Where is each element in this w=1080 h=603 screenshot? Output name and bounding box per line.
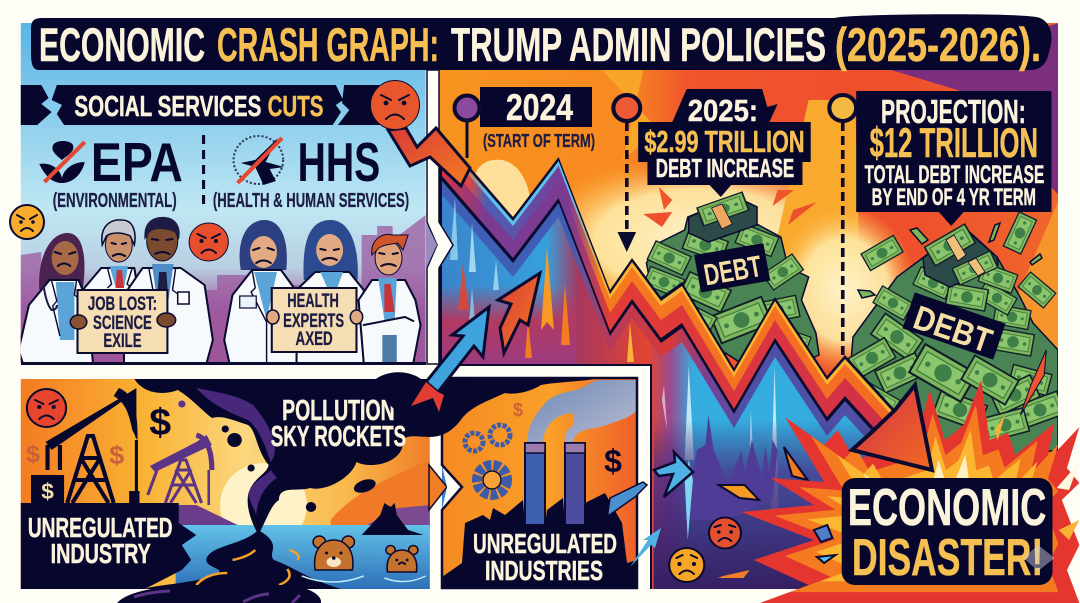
title banner: TRUMP ADMIN POLICIES — [451, 18, 826, 71]
gears — [465, 425, 510, 495]
purple haze in the plume — [196, 388, 277, 515]
chart callout: 2025 debt increase: $2.99 TRILLION — [644, 123, 805, 159]
title banner: ECONOMIC — [39, 18, 205, 71]
faint dollar: $ — [513, 400, 523, 420]
sad emoji red — [709, 518, 741, 548]
caption: health and human services: (HEALTH & HUMAN SERVICES) — [213, 190, 409, 212]
sign: health experts axed: HEALTH — [287, 291, 339, 312]
bear small — [386, 546, 418, 572]
bear large — [313, 536, 354, 570]
title banner: CRASH GRAPH: — [217, 18, 439, 71]
DEBT label: DEBT — [909, 299, 997, 361]
DEBT label: DEBT — [701, 250, 764, 292]
sign: health experts axed — [267, 288, 363, 352]
heading banner: social services cuts: CUTS — [268, 90, 323, 123]
chimneys — [525, 443, 585, 525]
label: unregulated industry: UNREGULATED — [28, 512, 173, 544]
top bundle of cash — [923, 224, 998, 287]
chart callout: 2024: 2024 — [506, 87, 573, 128]
panel: unregulated industries — [440, 364, 652, 589]
water — [176, 525, 430, 589]
crash arrow head — [852, 385, 932, 470]
label: unregulated industries: UNREGULATED — [473, 528, 617, 559]
top-left panel zigzag tip — [426, 222, 437, 268]
doctor 1 — [19, 233, 93, 363]
top dark cloud — [442, 378, 600, 425]
white gutter upper — [427, 70, 453, 364]
pumpjack large: $ — [41, 479, 54, 504]
arrow: red pollution arrow — [498, 273, 540, 353]
sun — [220, 463, 307, 525]
wolf silhouette in water — [362, 503, 424, 535]
oil swirls — [196, 550, 299, 585]
dollar signs: $ — [149, 402, 171, 444]
purple hill — [139, 505, 238, 525]
right light streaks — [662, 365, 779, 510]
pumpjack large — [31, 388, 139, 505]
chart callout: 2025 debt increase: DEBT INCREASE — [656, 153, 794, 183]
chart callout: 2024 — [454, 87, 595, 158]
debt pile projection — [848, 212, 1065, 460]
lower streak — [685, 460, 693, 540]
logo: HHS: HHS — [298, 131, 380, 193]
label: unregulated industries: INDUSTRIES — [485, 555, 603, 586]
pumpjack small — [148, 435, 212, 505]
arrow: lower blue arrow right — [654, 452, 693, 497]
arrow: lower blue arrow slanted — [608, 482, 647, 516]
emoji: angry yellow — [10, 205, 44, 239]
text: pollution sky rockets: SKY ROCKETS — [271, 420, 406, 453]
factory smoke — [528, 380, 637, 443]
chart callout: 2025 debt increase — [613, 89, 811, 252]
oil spill below frame — [117, 585, 321, 603]
chart background sunburst — [440, 23, 1058, 456]
skyline spikes — [685, 415, 778, 520]
doctor 4 — [224, 220, 298, 363]
sad emoji yellow — [669, 548, 704, 582]
flames and streaks under the line — [450, 197, 634, 362]
title banner — [31, 14, 1052, 71]
emoji: angry red lower — [27, 389, 66, 427]
DEBT label — [694, 243, 770, 293]
oil streaks — [134, 591, 300, 603]
dark dollar: $ — [604, 443, 622, 479]
logo: EPA — [39, 140, 182, 184]
callout: Economic Disaster — [842, 478, 1055, 587]
heading banner: social services cuts: SOCIAL SERVICES — [74, 90, 261, 123]
text: pollution sky rockets — [271, 394, 406, 453]
crimson lower wash — [441, 285, 575, 365]
label: unregulated industry: INDUSTRY — [51, 538, 151, 570]
pollution cloud and plume — [134, 379, 430, 535]
bottom border of upper panel — [21, 362, 426, 365]
chart callout: projection — [829, 91, 1051, 355]
sign: health experts axed: EXPERTS — [283, 311, 344, 332]
caption: environmental: (ENVIRONMENTAL) — [53, 190, 177, 212]
explosion — [741, 350, 1079, 603]
chart callout: 2025 debt increase: 2025: — [688, 92, 758, 128]
emoji: angry red middle — [189, 223, 228, 261]
label: unregulated industry — [21, 503, 196, 589]
text: pollution sky rockets: POLLUTION — [282, 394, 395, 427]
ripples — [302, 576, 426, 582]
shards — [718, 447, 808, 578]
panel: economic crash chart — [436, 23, 1065, 590]
sign: job lost — [70, 290, 176, 353]
doctor 5 — [297, 220, 364, 363]
label: unregulated industries — [442, 493, 637, 588]
logo: HHS — [232, 135, 379, 185]
sign: health experts axed: AXED — [296, 329, 333, 350]
divider — [202, 135, 205, 205]
lower-left panel zigzag tip — [429, 465, 447, 510]
sign: job lost: JOB LOST: — [88, 294, 157, 315]
dollar signs: $ — [26, 441, 40, 468]
arrow: lower blue arrow small — [630, 528, 661, 567]
chart callout: 2024: (START OF TERM) — [483, 131, 595, 151]
logo: EPA: EPA — [91, 131, 183, 193]
orange hills — [331, 460, 430, 530]
dollar signs — [26, 402, 171, 470]
sign: job lost: SCIENCE — [93, 313, 152, 334]
debt pile 2025 — [643, 192, 819, 380]
crash line band — [440, 157, 894, 589]
crash line start ray — [388, 128, 470, 186]
flying bills — [858, 212, 1056, 308]
doctor 2 — [83, 219, 136, 289]
top bundle of cash — [689, 192, 757, 242]
oil spill — [145, 530, 341, 589]
pollution cloud bump over gutter — [370, 372, 470, 437]
arrow: blue pollution arrow — [411, 307, 489, 412]
gutter between lower panels — [430, 378, 442, 589]
soot blobs — [178, 400, 378, 512]
dark purple dusk floor — [654, 423, 877, 589]
skyline — [21, 215, 426, 363]
heading banner: social services cuts — [21, 85, 384, 125]
panel: social services cuts — [19, 23, 426, 363]
dollar signs: $ — [109, 440, 125, 470]
panel: unregulated industry — [21, 379, 430, 589]
left border of chart — [440, 168, 442, 363]
emoji: angry large — [370, 80, 420, 130]
sign: job lost: EXILE — [103, 331, 142, 352]
doctor 3 — [124, 217, 213, 363]
doctor 6 — [359, 234, 421, 363]
